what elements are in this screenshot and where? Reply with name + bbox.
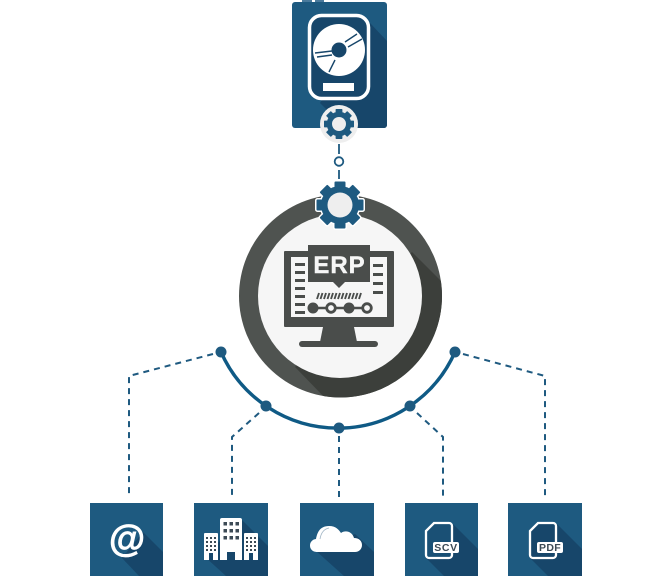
dashed connectors — [129, 354, 545, 497]
link between gears — [335, 144, 343, 179]
data source arc — [216, 346, 460, 434]
right data lines — [373, 264, 383, 294]
left data lines — [295, 263, 305, 314]
erp ring — [239, 194, 445, 400]
tile: scv file — [405, 503, 478, 576]
monitor icon — [284, 245, 394, 347]
tile: pdf file — [508, 503, 582, 576]
tile: pdf file: PDF — [539, 542, 561, 554]
large gear — [318, 182, 362, 228]
tile: cloud — [300, 503, 374, 576]
drive platter housing — [310, 16, 368, 98]
tile: scv file: SCV — [434, 542, 458, 554]
buildings icon — [204, 518, 258, 560]
tile: email: @ — [109, 518, 145, 559]
hard drive — [292, 0, 387, 128]
erp speech bubble: ERP — [313, 252, 366, 279]
process flow — [308, 302, 371, 314]
tile: buildings — [194, 503, 268, 576]
hatch bar — [317, 293, 361, 299]
tile: email — [90, 503, 163, 576]
drive slot — [323, 83, 354, 91]
disc — [313, 24, 365, 76]
small gear — [320, 105, 358, 143]
